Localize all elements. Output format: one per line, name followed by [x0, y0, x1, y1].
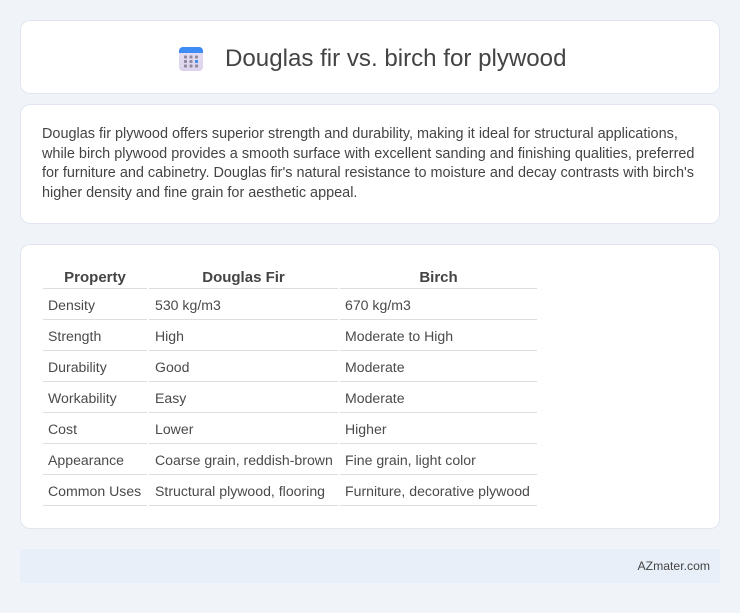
- comparison table: Furniture, decorative plywood: [345, 483, 530, 499]
- comparison table: 530 kg/m3: [155, 297, 221, 313]
- comparison table: Durability: [48, 359, 107, 375]
- comparison table: Lower: [155, 421, 193, 437]
- comparison table: Strength: [48, 328, 101, 344]
- comparison table: Workability: [48, 390, 117, 406]
- comparison table: Appearance: [48, 452, 124, 468]
- summary text: [42, 126, 694, 201]
- comparison table: Structural plywood, flooring: [155, 483, 325, 499]
- panel: summary: [20, 104, 720, 224]
- comparison table: Common Uses: [48, 483, 141, 499]
- comparison table: High: [155, 328, 184, 344]
- comparison table: Good: [155, 359, 189, 375]
- icon: calendar: [179, 47, 203, 71]
- comparison table: Moderate to High: [345, 328, 453, 344]
- comparison table: Property: [64, 269, 126, 286]
- summary text: while birch plywood provides a smooth surface with excellent sanding and finishing qualities, preferred: [42, 146, 694, 162]
- panel: header: [20, 20, 720, 94]
- comparison table: Coarse grain, reddish-brown: [155, 452, 333, 468]
- panel: comparison table: [20, 244, 720, 529]
- summary text: higher density and fine grain for aesthetic appeal.: [42, 185, 357, 201]
- summary text: Douglas fir plywood offers superior strength and durability, making it ideal for structural applications,: [42, 126, 678, 142]
- comparison table: Douglas Fir: [202, 269, 285, 286]
- comparison table: Fine grain, light color: [345, 452, 476, 468]
- title: Douglas fir vs. birch for plywood: [225, 45, 566, 72]
- comparison table: Cost: [48, 421, 77, 437]
- comparison table: Moderate: [345, 390, 405, 406]
- footer bar: [20, 549, 720, 583]
- comparison table: Density: [48, 297, 95, 313]
- comparison table: Easy: [155, 390, 186, 406]
- footer credit: AZmater.com: [638, 559, 710, 573]
- summary text: for furniture and cabinetry. Douglas fir's natural resistance to moisture and decay contrasts with birch's: [42, 165, 694, 181]
- comparison table: Birch: [419, 269, 458, 286]
- comparison table: 670 kg/m3: [345, 297, 411, 313]
- comparison table: Moderate: [345, 359, 405, 375]
- comparison table: Higher: [345, 421, 387, 437]
- comparison table: [43, 269, 537, 506]
